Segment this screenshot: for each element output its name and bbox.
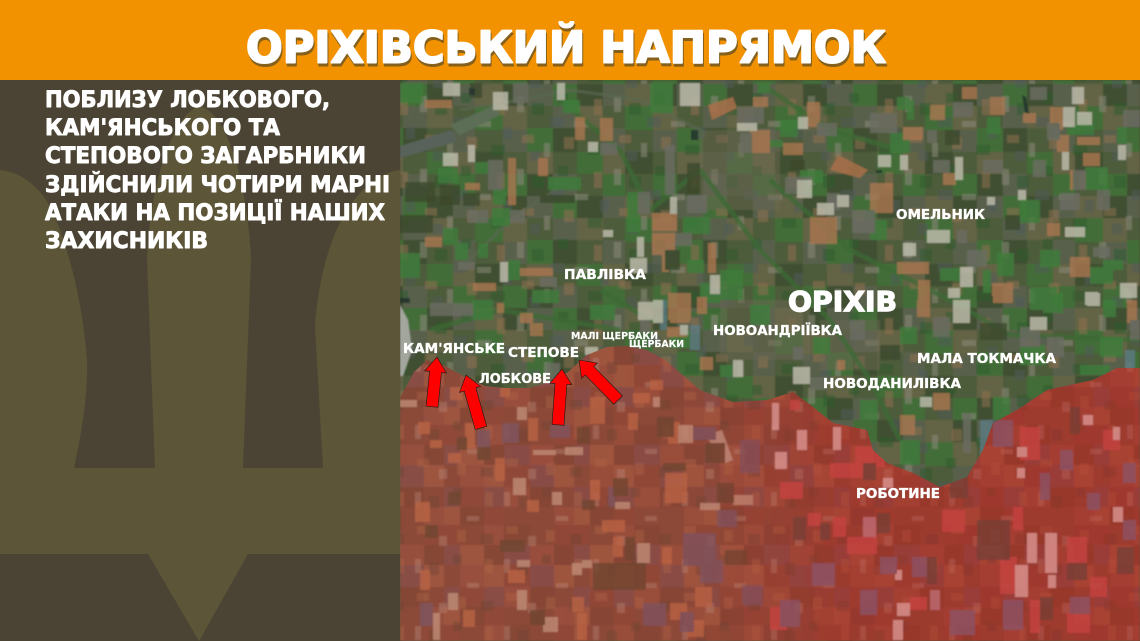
label: Роботине: РОБОТИНЕ bbox=[856, 486, 940, 502]
label: Щербаки: ЩЕРБАКИ bbox=[629, 339, 684, 350]
text block: description bbox=[45, 88, 390, 254]
text block: description: АТАКИ НА ПОЗИЦІЇ НАШИХ bbox=[45, 200, 385, 226]
map labels bbox=[403, 207, 1057, 502]
label: Кам'янське: КАМ'ЯНСЬКЕ bbox=[403, 341, 505, 357]
text block: description: ПОБЛИЗУ ЛОБКОВОГО, bbox=[45, 88, 330, 113]
text block: description: КАМ'ЯНСЬКОГО ТА bbox=[45, 116, 280, 141]
header bar bbox=[0, 0, 1140, 80]
text block: description: ЗДІЙСНИЛИ ЧОТИРИ МАРНІ bbox=[45, 172, 390, 198]
left panel background bbox=[0, 80, 400, 641]
label: Оріхів: ОРІХІВ bbox=[788, 285, 897, 318]
label: Лобкове: ЛОБКОВЕ bbox=[479, 371, 551, 387]
label: Степове: СТЕПОВЕ bbox=[508, 345, 579, 361]
arrow: near Stepove south bbox=[547, 368, 573, 426]
icon: trident emblem watermark bbox=[0, 106, 400, 641]
occupied territory overlay bbox=[400, 340, 1140, 641]
text block: description: ЗАХИСНИКІВ bbox=[45, 229, 208, 254]
label: Малі Щербаки: МАЛІ ЩЕРБАКИ bbox=[571, 331, 658, 342]
map: satellite farmland bbox=[400, 80, 1140, 641]
arrow: near Lobkove bbox=[455, 372, 492, 431]
label: Новоандріївка: НОВОАНДРІЇВКА bbox=[713, 322, 843, 339]
label: Мала Токмачка: МАЛА ТОКМАЧКА bbox=[917, 351, 1057, 367]
label: Новоданилівка: НОВОДАНИЛІВКА bbox=[823, 376, 962, 392]
label: Омельник: ОМЕЛЬНИК bbox=[896, 207, 985, 223]
title: ОРІХІВСЬКИЙ НАПРЯМОК bbox=[246, 20, 886, 74]
label: Павлівка: ПАВЛІВКА bbox=[564, 267, 647, 283]
arrow: near Kamianske bbox=[421, 356, 448, 408]
attack arrows bbox=[421, 352, 626, 431]
arrow: near Stepove east bbox=[571, 352, 626, 408]
text block: description: СТЕПОВОГО ЗАГАРБНИКИ bbox=[45, 144, 366, 169]
